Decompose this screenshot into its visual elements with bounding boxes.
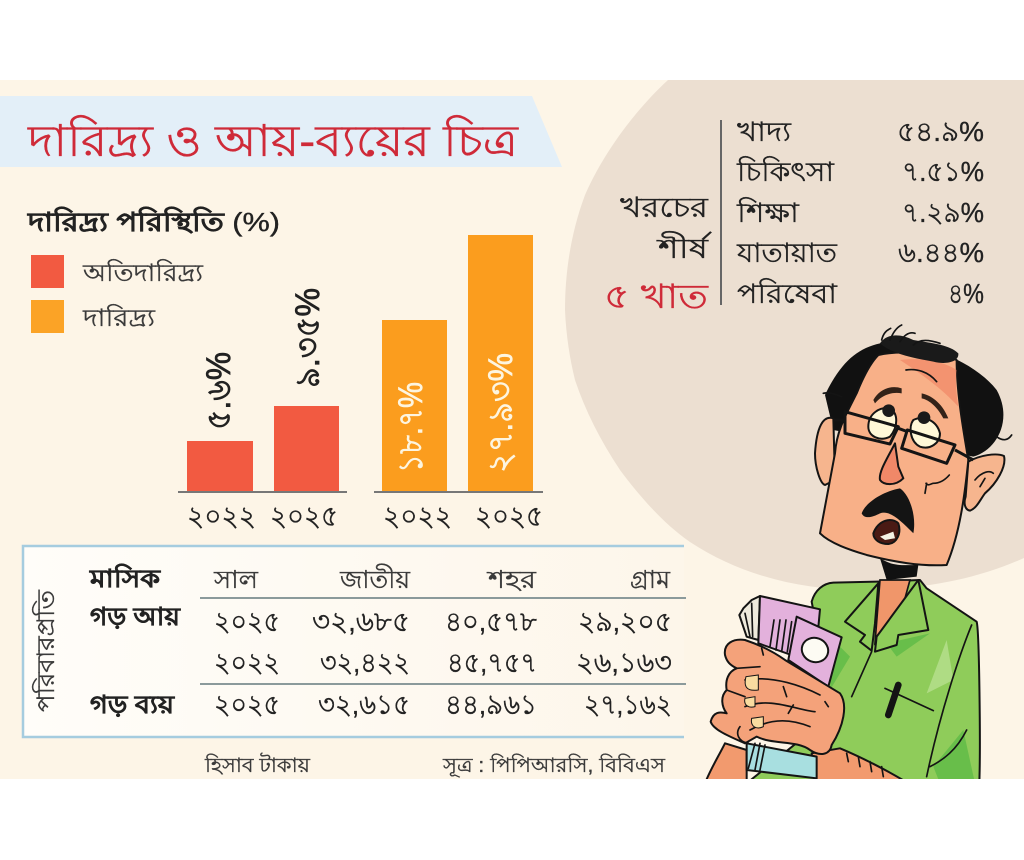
household income and expense table: ৩২,৬৮৫ bbox=[312, 606, 410, 637]
chart heading: দারিদ্র্য পরিস্থিতি (%) bbox=[27, 206, 280, 237]
household income and expense table: ৩২,৬১৫ bbox=[318, 689, 410, 720]
illustration: worried man with money bbox=[705, 325, 1012, 783]
household income and expense table: গড় ব্যয় bbox=[90, 691, 175, 719]
household income and expense table: ২০২৫ bbox=[214, 689, 280, 720]
household income and expense table: ৪৪,৯৬১ bbox=[445, 689, 537, 720]
bar chart: poverty: ১৮.৭% bbox=[392, 382, 430, 473]
unit note: হিসাব টাকায় bbox=[204, 753, 311, 777]
top 5 expense categories: পরিষেবা bbox=[737, 278, 838, 309]
bar chart: poverty: ২০২৫ bbox=[475, 501, 543, 533]
top 5 expense categories: ৬.৪৪% bbox=[898, 237, 984, 268]
tan circle background bbox=[565, 80, 1024, 590]
top 5 expense categories: শিক্ষা bbox=[736, 197, 800, 228]
man's body and hands bbox=[705, 580, 980, 783]
household income and expense table: গ্রাম bbox=[630, 566, 671, 594]
household income and expense table: ২৬,১৬৩ bbox=[576, 647, 672, 678]
household income and expense table: ৪৫,৭৫৭ bbox=[447, 647, 537, 678]
household income and expense table: ২০২৫ bbox=[214, 606, 280, 637]
legend bbox=[31, 255, 204, 333]
top 5 expense categories: ৭.২৯% bbox=[902, 197, 984, 228]
legend: দারিদ্র্য bbox=[82, 304, 156, 332]
household income and expense table: সাল bbox=[213, 566, 258, 594]
top 5 expense categories: ৫৪.৯% bbox=[897, 116, 984, 147]
top 5 expense categories: ৫ খাত bbox=[604, 278, 709, 316]
bar chart: extreme poverty: ৫.৬% bbox=[200, 352, 238, 430]
household income and expense table: ২০২২ bbox=[214, 647, 280, 678]
household income and expense table: জাতীয় bbox=[339, 564, 411, 594]
bar chart: extreme poverty: ২০২৫ bbox=[270, 501, 338, 533]
household income and expense table: ২৭,১৬২ bbox=[584, 689, 672, 720]
banknotes bbox=[739, 596, 760, 640]
household income and expense table: পরিবারপ্রতি bbox=[32, 589, 60, 712]
man's head bbox=[815, 325, 1012, 580]
source note: সূত্র : পিপিআরসি, বিবিএস bbox=[442, 754, 666, 777]
top 5 expense categories: খাদ্য bbox=[737, 117, 792, 147]
legend: অতিদারিদ্র্য bbox=[82, 259, 204, 287]
top 5 expense categories: চিকিৎসা bbox=[736, 156, 835, 187]
forearm: arm bbox=[810, 747, 903, 779]
bar chart: poverty: ২০২২ bbox=[383, 501, 452, 533]
bar chart: extreme poverty bbox=[178, 288, 347, 533]
household income and expense table: শহর bbox=[486, 566, 537, 594]
household income and expense table: গড় আয় bbox=[90, 603, 181, 631]
title banner: দারিদ্র্য ও আয়-ব্যয়ের চিত্র bbox=[27, 115, 519, 166]
household income and expense table bbox=[23, 546, 686, 737]
top 5 expense categories: যাতায়াত bbox=[736, 238, 838, 268]
top 5 expense categories bbox=[604, 116, 984, 316]
household income and expense table: ২৯,২০৫ bbox=[578, 606, 672, 637]
top 5 expense categories: ৪% bbox=[948, 278, 984, 309]
household income and expense table: ৩২,৪২২ bbox=[320, 647, 410, 678]
hand bbox=[711, 640, 844, 754]
forearm: wrist bbox=[705, 743, 747, 783]
household income and expense table: মাসিক bbox=[89, 563, 162, 593]
top 5 expense categories: ৭.৫১% bbox=[902, 156, 984, 187]
top 5 expense categories: খরচের bbox=[620, 192, 709, 223]
bar chart: extreme poverty: ৯.৩৫% bbox=[289, 288, 327, 388]
bar chart: poverty: ২৭.৯৩% bbox=[482, 353, 520, 473]
bar chart: extreme poverty: ২০২২ bbox=[187, 501, 256, 533]
bar chart: poverty bbox=[374, 235, 543, 533]
household income and expense table: ৪০,৫৭৮ bbox=[445, 606, 537, 637]
top 5 expense categories: শীর্ষ bbox=[656, 231, 712, 264]
title banner bbox=[0, 96, 562, 167]
